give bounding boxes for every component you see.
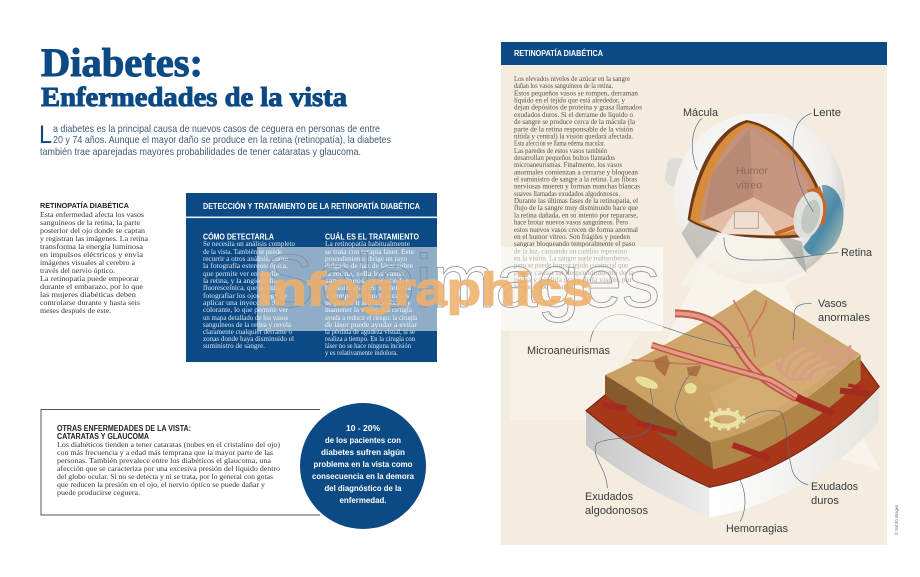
panel header [501, 42, 887, 65]
eye interior [688, 120, 827, 238]
column: cuál es el tratamiento: ayuda a reducir el riesgo: la cirugía [325, 314, 418, 322]
label: humor vítreo: Humor [736, 166, 769, 177]
block labels: anormales [818, 312, 871, 324]
optic nerve [664, 157, 691, 188]
panel: detección y tratamiento [186, 193, 437, 362]
column: cuál es el tratamiento: de láser puede ayudar a evitar [325, 321, 418, 329]
callout: 10-20% circle: diabetes sufren algún [321, 447, 405, 457]
block labels: Vasos [818, 298, 847, 310]
column: cuál es el tratamiento: la retina, sella los vasos [325, 270, 404, 278]
panel body text: líquido en el tejido que está alrededor, y [514, 96, 625, 104]
microaneurisms and hemorrhages [653, 355, 702, 377]
title: Diabetes: [41, 40, 203, 85]
callout: 10-20% circle: problema en la vista como [314, 459, 412, 469]
column: cómo detectarla: la retina, y la angiografía [203, 277, 278, 285]
column: cuál es el tratamiento: y es relativamente indolora. [325, 349, 398, 357]
callout: 10-20% circle: de los pacientes con [325, 435, 401, 445]
panel body text: afección que se caracteriza por una excesiva presión del líquido dentro [57, 464, 280, 473]
panel body text: Las paredes de estos vasos también [514, 147, 607, 155]
intro text: 20 y 74 años. Aunque el mayor daño se produce en la retina (retinopatía), la diabetes [53, 134, 391, 146]
column: cómo detectarla: de la vista. También se puede [203, 248, 282, 256]
text block: retinopatía diabética: posterior del ojo donde se captan [40, 226, 145, 235]
text block: retinopatía diabética: La retinopatía puede empeorar [40, 274, 139, 283]
panel body text: puede causar un desprendimiento de la [514, 269, 635, 277]
text block: retinopatía diabética: transforma la energía luminosa [40, 242, 144, 251]
column: cómo detectarla: colorante, lo que permite ver [203, 306, 289, 314]
panel body text: flujo de la sangre muy disminuido hace que [514, 204, 638, 212]
callout: 10-20% circle: del diagnóstico de la [324, 483, 402, 493]
callout: 10-20% circle: 10 - 20% [346, 423, 381, 433]
column: cuál es el tratamiento: delgado de haz de láser sobre [325, 262, 413, 270]
panel header: RETINOPATÍA DIABÉTICA [514, 49, 603, 58]
eye labels: Retina [841, 247, 873, 259]
panel body text: en el humor vítreo. Son frágiles y pueden [514, 233, 630, 241]
panel body text: Los elevados niveles de azúcar en la sangre [514, 75, 630, 83]
watermark: Infographics [257, 263, 593, 315]
cut vessels [603, 385, 870, 458]
panel body text: con más frecuencia y a edad más temprana que la mayor parte de las [57, 448, 273, 457]
column: cómo detectarla: fluoresceínica, que permite [203, 284, 281, 292]
label: humor vítreo [736, 166, 769, 192]
text block: retinopatía diabética: RETINOPATÍA DIABÉTICA [40, 201, 130, 210]
column: cuál es el tratamiento: la pérdida de agudeza visual, si se [325, 328, 415, 336]
column: cómo detectarla: que permite ver en detalle [203, 270, 279, 278]
panel heading [57, 424, 191, 441]
title [41, 40, 348, 112]
column: cuál es el tratamiento: procedimiento dirige un rayo [325, 255, 407, 263]
panel body text: desarrollan pequeños bultos llamados [514, 154, 615, 162]
image credit: © Sol 90 Images [893, 504, 899, 535]
panel: retinopatía diabética illustrated [501, 42, 887, 545]
block top [605, 289, 860, 443]
panel heading: OTRAS ENFERMEDADES DE LA VISTA: [57, 424, 191, 433]
panel body text: Los diabéticos tienden a tener cataratas (nubes en el cristalino del ojo) [57, 440, 280, 449]
light cone from eye to block [510, 210, 880, 470]
panel body text: Esta afección se llama edema macular. [514, 140, 605, 148]
column: cómo detectarla: zonas donde haya disminuido el [203, 335, 294, 343]
block labels: algodonosos [585, 505, 648, 517]
lens [789, 185, 844, 256]
panel body text: personas. También prevalece entre los diabéticos el glaucoma, una [57, 456, 272, 465]
text block: retinopatía diabética: controlarse durante y hasta seis [40, 298, 140, 307]
leader lines [692, 113, 838, 260]
abnormal vessels [777, 337, 853, 380]
panel body text: retina y pérdida grave de la visión, por [514, 276, 633, 284]
column: cómo detectarla: un mapa detallado de los vasos [203, 314, 288, 322]
column: cuál es el tratamiento: realiza a tiempo. En la cirugía con [325, 335, 415, 343]
callout: 10-20% circle: consecuencia en la demora [312, 471, 414, 481]
intro text: a diabetes es la principal causa de nuevos casos de ceguera en personas de entre [53, 123, 380, 135]
title: Enfermedades de la vista [41, 82, 348, 112]
panel: otras enfermedades de la vista [41, 410, 320, 515]
hard exudates [706, 410, 744, 429]
block labels: duros [811, 495, 839, 507]
panel body text: el suministro de sangre a la retina. Las fibras [514, 176, 637, 184]
panel body text: Durante las últimas fases de la retinopatía, el [514, 197, 638, 205]
macula square [734, 212, 758, 228]
illustration: retina block [586, 289, 879, 522]
column: cuál es el tratamiento: CUÁL ES EL TRATAMIENTO [325, 232, 419, 242]
panel body text: la retina dañada, en su intento por repararse, [514, 211, 638, 219]
panel body text: nítida y central) la visión quedará afectada. [514, 132, 633, 140]
column: cómo detectarla: Se necesita un análisis completo [203, 240, 295, 248]
intro text: L [39, 121, 52, 149]
cotton wool exudates [634, 374, 697, 394]
watermark: Soloimages [263, 239, 660, 323]
block left and right faces [605, 375, 713, 469]
column: cómo detectarla: recurrir a otros análisis, como [203, 255, 288, 263]
panel body text: nerviosas mueren y forman manchas blancas [514, 183, 640, 191]
text block: retinopatía diabética: meses después de este. [40, 306, 111, 315]
panel heading: CATARATAS Y GLAUCOMA [57, 432, 149, 441]
panel body text: dejan depósitos de proteína y grasa llamados [514, 104, 642, 112]
panel body text: de sangre se produce cerca de la mácula (la [514, 118, 636, 126]
column: cómo detectarla: claramente cualquier derrame o [203, 328, 292, 336]
column: cuál es el tratamiento: se trata con terapia láser. Este [325, 248, 414, 256]
white base [586, 387, 879, 517]
panel heading: DETECCIÓN Y TRATAMIENTO DE LA RETINOPATÍA DIABÉTICA [203, 202, 420, 211]
column: cómo detectarla: aplicar una inyección de [203, 299, 279, 307]
text block: retinopatía diabética: imágenes visuales al cerebro a [40, 258, 136, 267]
column: cuál es el tratamiento: a tiempo, en muchos casos [325, 292, 409, 300]
block labels: Exudados [585, 491, 633, 503]
column: cómo detectarla: la fotografía estereoscópica, [203, 262, 288, 270]
eye labels: Lente [813, 107, 841, 119]
column: cómo detectarla: suministro de sangre. [203, 342, 265, 350]
panel body text: anormales comienzan a cerrarse y bloquean [514, 168, 638, 176]
block labels: Microaneurismas [527, 345, 610, 357]
main retinal vessels [632, 300, 833, 413]
panel body text: que reducen la presión en el ojo, el nervio óptico se puede dañar y [57, 480, 265, 489]
column: cómo detectarla: fotografiar los ojos luego de [203, 292, 287, 300]
text block: retinopatía diabética: las mujeres diabéticas deben [40, 290, 136, 299]
callout: 10-20% circle [300, 403, 426, 529]
panel body text: dañan los vasos sanguíneos de la retina. [514, 82, 613, 90]
block labels: Exudados [811, 481, 858, 493]
block labels: Hemorragias [726, 523, 788, 535]
panel body text: hace brotar nuevos vasos sanguíneos. Pero [514, 219, 628, 227]
illustration: eye cross-section [664, 113, 845, 287]
panel body text: en la visión. La sangre suele reabsorberse, [514, 254, 630, 262]
intro text [39, 121, 391, 158]
text block: retinopatía diabética: Esta enfermedad afecta los vasos [40, 210, 144, 219]
text block: retinopatía diabética: y registran las imágenes. La retina [40, 234, 149, 243]
column: cuál es el tratamiento: láser no se hace ninguna incisión [325, 342, 411, 350]
panel body text: microaneurismas. Finalmente, los vasos [514, 161, 622, 169]
panel body text: del globo ocular. Si no se detecta y ni se trata, por lo general con gotas [57, 472, 273, 481]
panel body text: de la luz, causando un cambio repentino [514, 247, 627, 255]
column: cuál es el tratamiento: se puede tratar con éxito y [325, 299, 411, 307]
column: cómo detectarla: sanguíneos de la retina y revela [203, 321, 292, 329]
text block: retinopatía diabética: través del nervio óptico. [40, 266, 115, 275]
panel body text: exudados duros. Si el derrame de líquido o [514, 111, 633, 119]
red layer [586, 360, 879, 487]
panel body text: sangrar bloqueando temporalmente el paso [514, 240, 635, 248]
leader lines [590, 303, 812, 522]
text block: retinopatía diabética [40, 201, 149, 315]
label: humor vítreo: vítreo [736, 181, 762, 192]
column: cuál es el tratamiento: hemorragias. Si se detecta [325, 284, 412, 292]
column: cómo detectarla: CÓMO DETECTARLA [203, 230, 274, 242]
text block: retinopatía diabética: durante el embarazo, por lo que [40, 282, 144, 291]
column: cuál es el tratamiento: mantener la visión. La cirugía [325, 306, 413, 314]
panel body text [57, 440, 280, 497]
text block: retinopatía diabética: sanguíneos de la retina, la parte [40, 218, 141, 227]
panel body text [514, 75, 642, 291]
eye labels [683, 107, 873, 259]
intro text: también trae aparejadas mayores probabilidades de tener cataratas y glaucoma. [40, 146, 361, 158]
panel body text: puede producirse ceguera. [57, 488, 140, 497]
callout: 10-20% circle: enfermedad. [340, 495, 386, 505]
panel body text: Estos pequeños vasos se rompen, derraman [514, 89, 638, 97]
block labels [527, 298, 871, 535]
panel body text: parte de la retina responsable de la visión [514, 125, 633, 133]
eye labels: Mácula [683, 107, 719, 119]
panel body text: estos nuevos vasos crecen de forma anormal [514, 226, 638, 234]
column: cuál es el tratamiento [325, 232, 419, 357]
panel body text: suaves llamadas exudados algodonosos. [514, 190, 620, 198]
column: cuál es el tratamiento: La retinopatía habitualmente [325, 240, 410, 248]
panel body text: pero se puede formar tejido cicatricial que [514, 262, 628, 270]
column: cuál es el tratamiento: sanguíneos y reduce las [325, 277, 409, 285]
column: cómo detectarla [203, 230, 295, 350]
text block: retinopatía diabética: en impulsos eléctricos y envía [40, 250, 144, 259]
panel body text: lo que debe tratarse. [514, 283, 574, 291]
